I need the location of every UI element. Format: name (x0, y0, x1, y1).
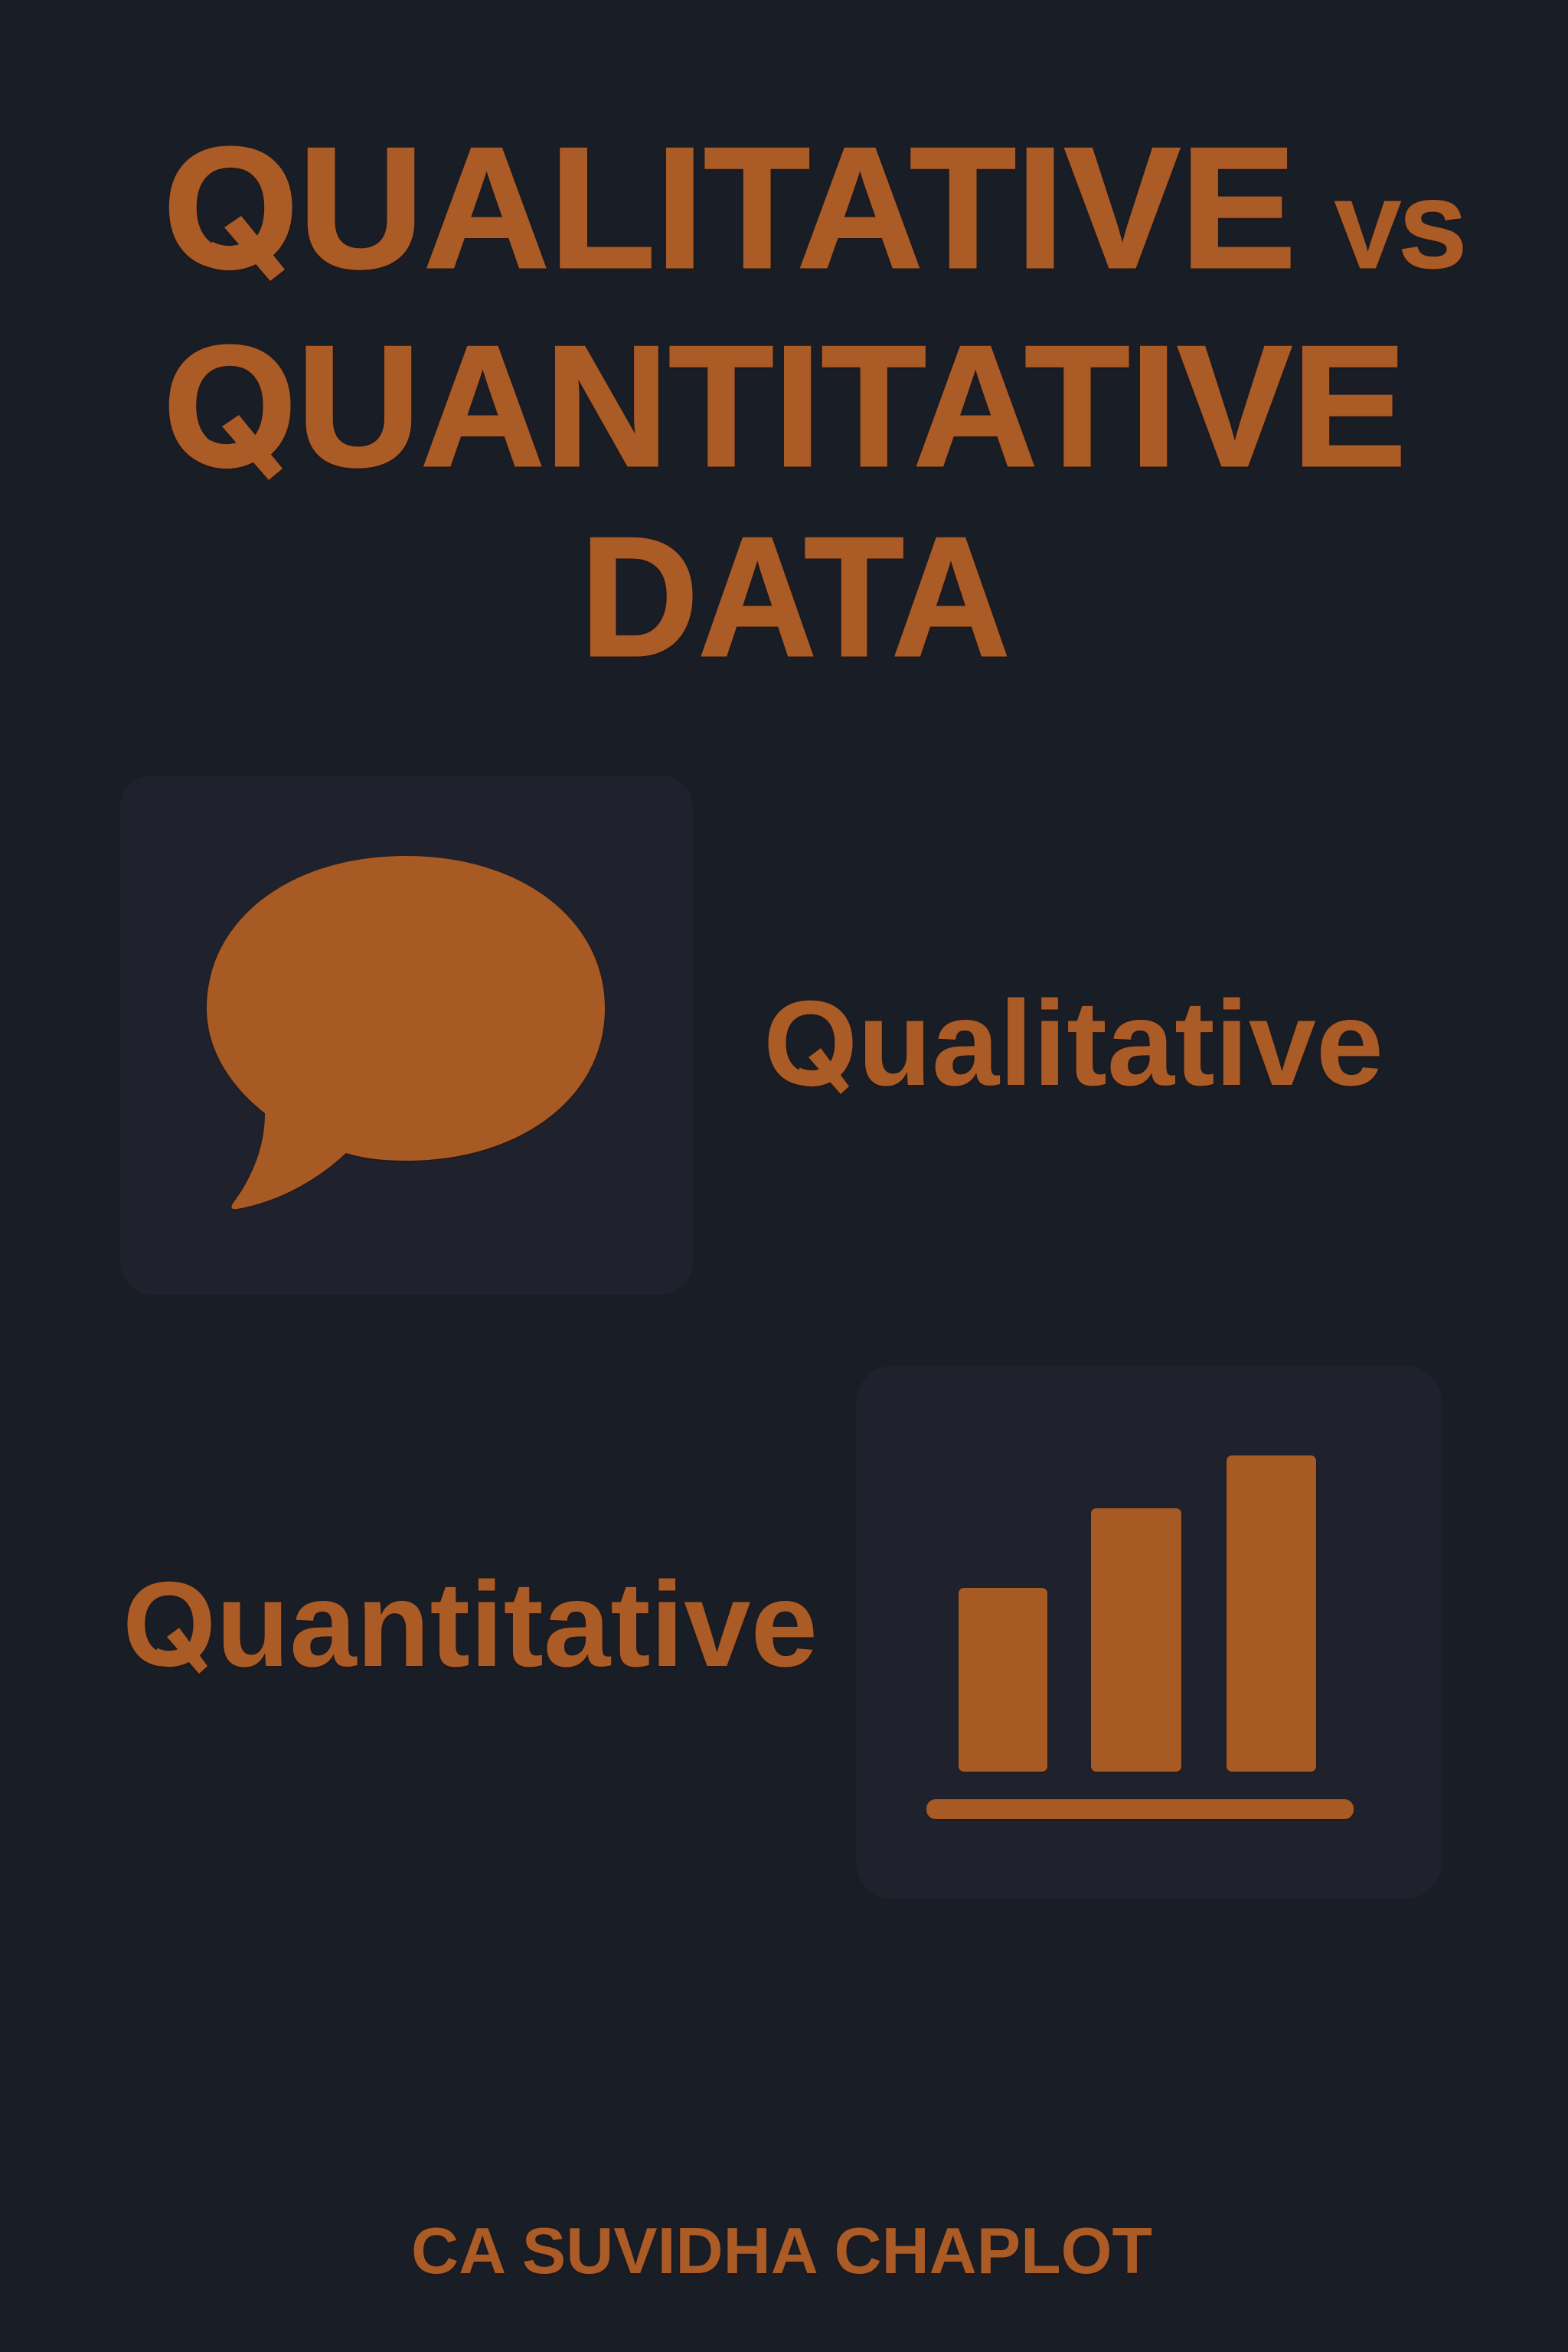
panel: quantitative icon (856, 1366, 1442, 1899)
label: quantitative (127, 1579, 814, 1674)
icon: speech bubble (207, 856, 605, 1209)
footer: author: CA SUVIDHA CHAPLOT (411, 2215, 1152, 2288)
label: qualitative: Qualitative (763, 976, 1383, 1111)
title (168, 145, 1463, 658)
title: QUALITATIVE (163, 111, 1296, 304)
icon: bar chart (926, 1455, 1354, 1819)
title: QUANTITATIVE (163, 309, 1406, 502)
panel: qualitative icon (120, 776, 693, 1295)
label: quantitative: Quantitative (122, 1557, 818, 1692)
title: VS (1335, 183, 1465, 288)
title: DATA (580, 502, 1010, 692)
